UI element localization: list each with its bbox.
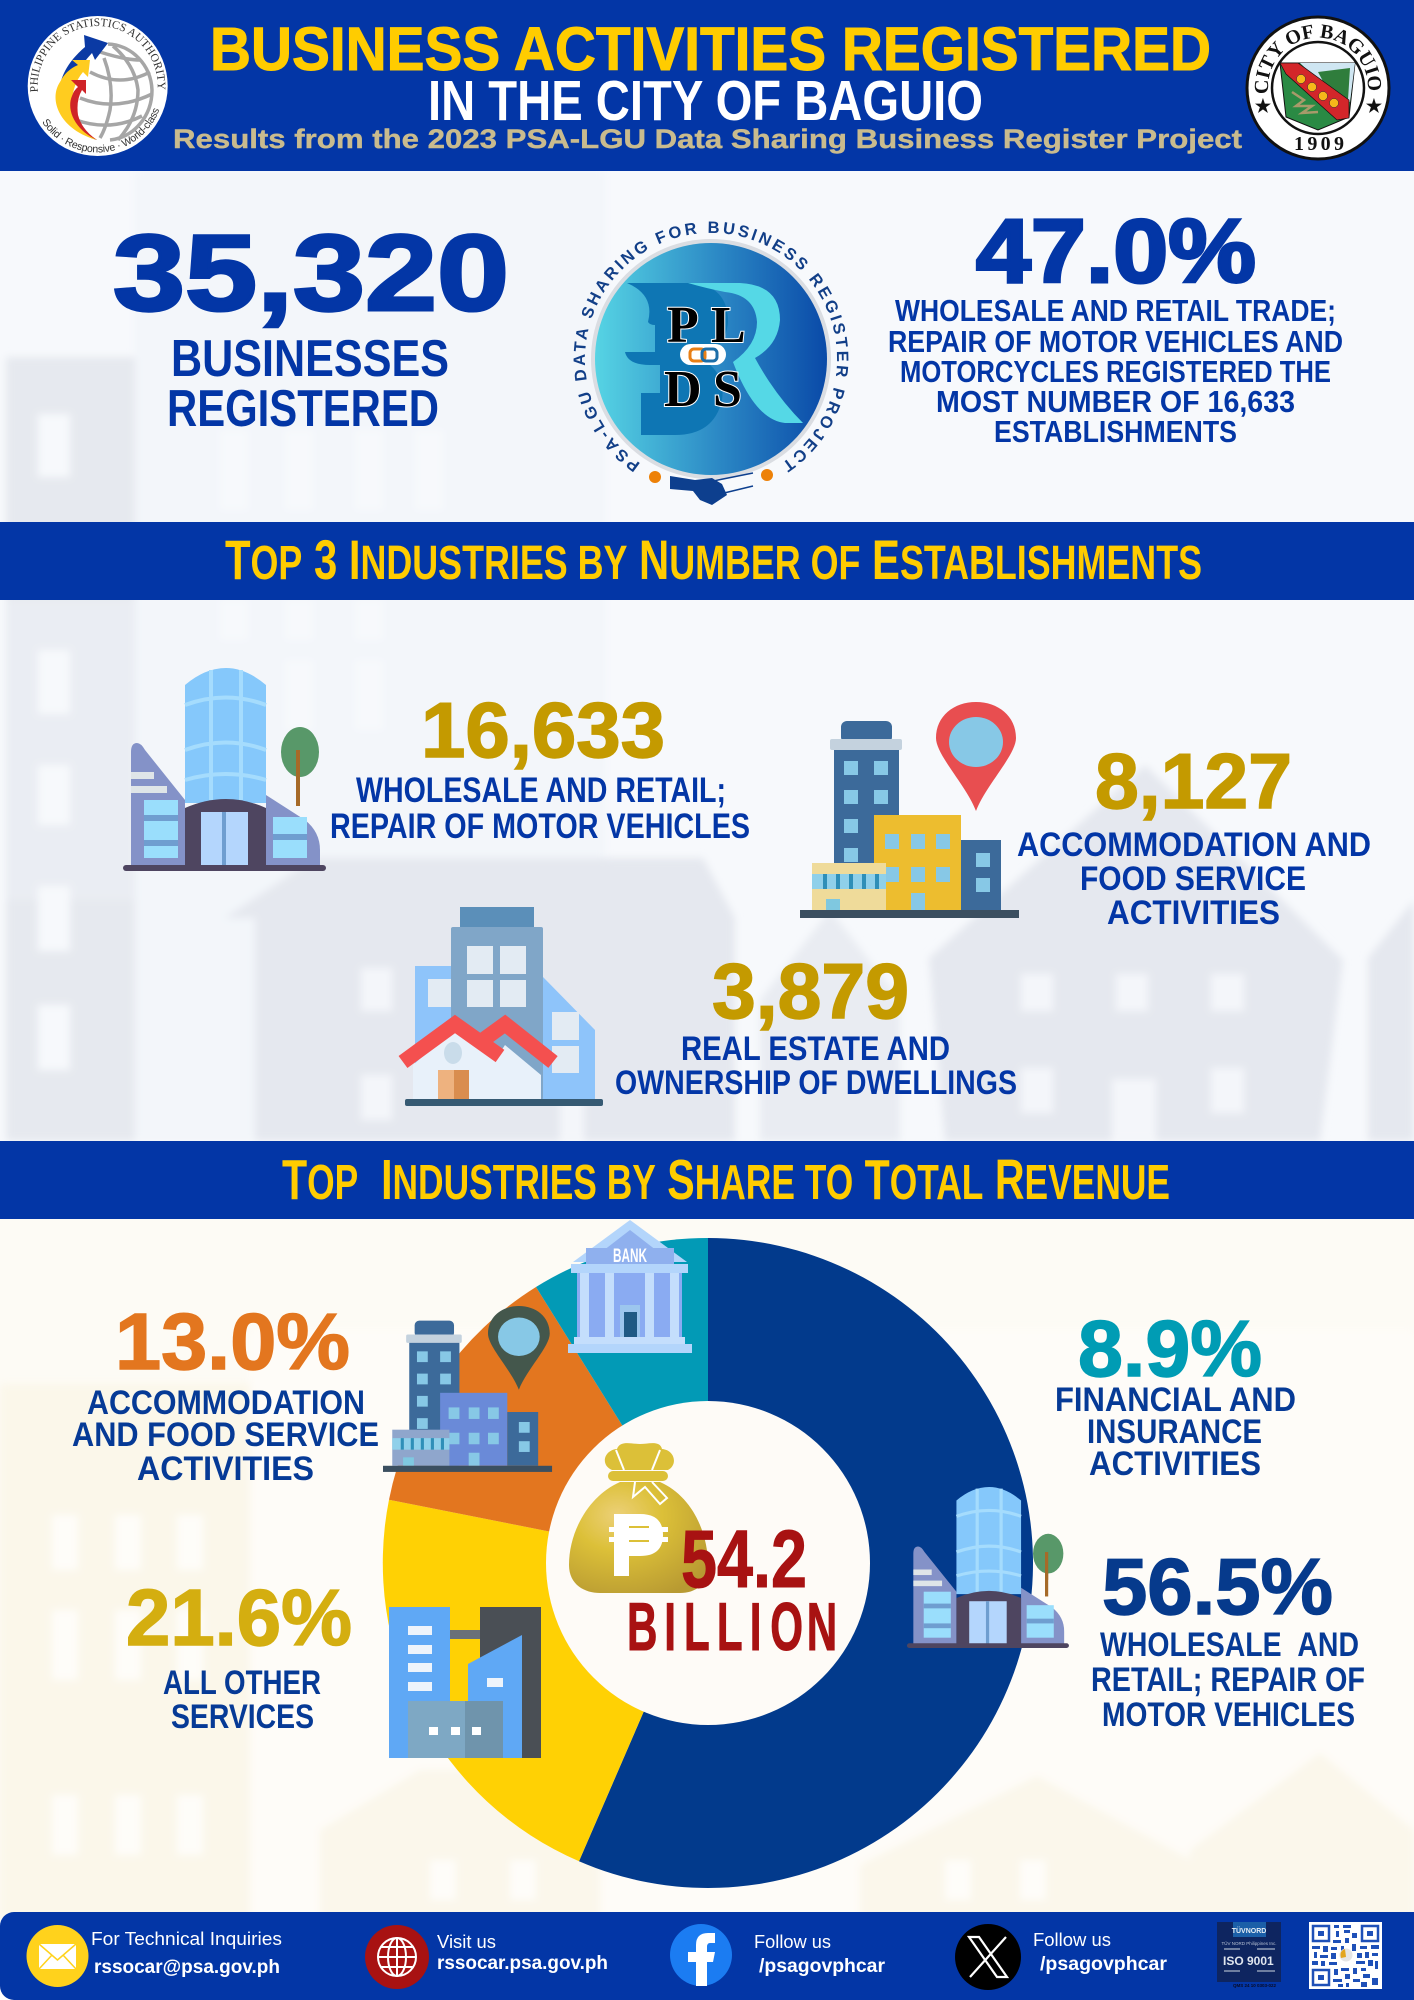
icon: City of Baguio seal <box>1246 16 1390 160</box>
section heading band: top industries by revenue <box>0 1141 1414 1219</box>
icon: PLDS data sharing logo: PSA-LGU DATA SHARING FOR BUSINESS REGISTER PROJECT <box>574 222 848 472</box>
stat: 47.0% wholesale and retail: MOST NUMBER OF 16,633 <box>936 384 1295 419</box>
stat: 47.0% wholesale and retail: MOTORCYCLES REGISTERED THE <box>900 354 1331 389</box>
label: 21.6% all other services: SERVICES <box>171 1698 314 1736</box>
icon: bank <box>568 1220 692 1353</box>
text: 3,879 real estate: OWNERSHIP OF DWELLINGS <box>615 1064 1017 1102</box>
icon: ISO 9001 badge: TÜV NORD Philippines Inc. <box>1221 1940 1277 1946</box>
text: 3,879 real estate: REAL ESTATE AND <box>681 1030 950 1068</box>
contact: X handle: Follow us <box>1033 1930 1111 1950</box>
stat: 35,320 businesses registered <box>113 212 509 438</box>
title <box>210 15 1211 133</box>
text: 8,127 accommodation <box>1017 737 1371 932</box>
label: 8.9% financial and insurance: INSURANCE <box>1087 1413 1262 1451</box>
contact: facebook handle: Follow us <box>754 1932 831 1952</box>
icon: office building <box>123 668 326 871</box>
text: 16,633 wholesale and retail: REPAIR OF MOTOR VEHICLES <box>330 807 750 846</box>
background: revenue section cityscape <box>0 1219 1414 1920</box>
icon: globe <box>365 1925 429 1989</box>
label: 13.0% accommodation <box>72 1297 379 1488</box>
icon: QR code <box>1309 1922 1382 1989</box>
icon: PLDS data sharing logo: DS <box>664 361 742 418</box>
label: 56.5% wholesale and retail: WHOLESALE AND <box>1100 1626 1359 1664</box>
donut hole <box>546 1401 870 1725</box>
center label: 54.2 billion: 54.2 <box>681 1514 807 1605</box>
icon: PSA logo <box>28 16 168 156</box>
stat: 35,320 businesses registered: 35,320 <box>113 212 509 333</box>
icon: real estate tower and house <box>403 907 603 1106</box>
stat: 35,320 businesses registered: BUSINESSES <box>171 330 449 388</box>
icon: City of Baguio seal: ★ <box>1366 96 1383 116</box>
segment: wholesale 56.5% <box>579 1238 1033 1888</box>
label: 8.9% financial and insurance: ACTIVITIES <box>1089 1445 1261 1483</box>
icon: City of Baguio seal: 1909 <box>1294 133 1344 155</box>
header banner <box>0 0 1414 171</box>
subtitle: Results from the 2023 PSA-LGU Data Sharing Business Register Project <box>173 124 1242 154</box>
text: 8,127 accommodation: ACTIVITIES <box>1107 894 1280 932</box>
stat: 47.0% wholesale and retail: ESTABLISHMENTS <box>994 414 1237 449</box>
text: 8,127 accommodation: FOOD SERVICE <box>1080 860 1306 898</box>
label: 56.5% wholesale and retail <box>1091 1542 1365 1734</box>
label: 56.5% wholesale and retail: MOTOR VEHICLES <box>1102 1696 1355 1734</box>
label: 21.6% all other services: 21.6% <box>126 1573 352 1662</box>
contact: website <box>437 1932 608 1974</box>
icon: handshake <box>670 473 753 505</box>
label: 56.5% wholesale and retail: 56.5% <box>1102 1542 1333 1631</box>
contact: X handle <box>1033 1930 1168 1975</box>
icon: email <box>26 1925 88 1987</box>
footer <box>0 1912 1414 2000</box>
text: 16,633 wholesale and retail: 16,633 <box>421 686 665 774</box>
icon: facebook <box>670 1924 732 1986</box>
text: 16,633 wholesale and retail <box>330 686 750 846</box>
donut chart: share to total revenue <box>383 1238 1033 1888</box>
contact: facebook handle <box>754 1932 886 1977</box>
label: 13.0% accommodation: ACCOMMODATION <box>87 1384 365 1422</box>
contact: technical inquiries: rssocar@psa.gov.ph <box>94 1957 280 1978</box>
icon: ISO 9001 badge <box>1217 1922 1281 1988</box>
contact: technical inquiries <box>91 1929 282 1978</box>
label: 56.5% wholesale and retail: RETAIL; REPAIR OF <box>1091 1661 1365 1699</box>
section heading band: top industries by revenue: TOP INDUSTRIES BY SHARE TO TOTAL REVENUE <box>282 1148 1170 1212</box>
center label: 54.2 billion: BILLION <box>627 1589 837 1664</box>
icon: City of Baguio seal: ★ <box>1255 96 1272 116</box>
text: 8,127 accommodation: ACCOMMODATION AND <box>1017 826 1371 864</box>
icon: City of Baguio seal: CITY OF BAGUIO <box>1254 24 1382 93</box>
section heading band: top 3 industries <box>0 522 1414 600</box>
text: 3,879 real estate <box>615 947 1017 1102</box>
center label: 54.2 billion <box>627 1514 837 1664</box>
icon: PSA logo: Solid · Responsive · World-class <box>43 108 159 153</box>
icon: ISO 9001 badge: ISO 9001 <box>1223 1954 1274 1968</box>
icon: city buildings in donut <box>383 1306 552 1472</box>
icon: money bag with peso sign <box>569 1443 708 1593</box>
label: 8.9% financial and insurance: FINANCIAL AND <box>1055 1381 1296 1419</box>
icon: PSA logo: PHILIPPINE STATISTICS AUTHORITY <box>30 18 166 92</box>
background: section cityscape <box>0 171 1414 1141</box>
label: 13.0% accommodation: ACTIVITIES <box>137 1450 314 1488</box>
icon: X <box>955 1924 1021 1990</box>
label: 13.0% accommodation: 13.0% <box>115 1297 350 1386</box>
contact: website: Visit us <box>437 1932 496 1952</box>
icon: office building in donut <box>907 1487 1069 1648</box>
label: 21.6% all other services <box>126 1573 352 1736</box>
label: 21.6% all other services: ALL OTHER <box>163 1664 321 1702</box>
stat: 47.0% wholesale and retail <box>888 202 1343 449</box>
label: 8.9% financial and insurance <box>1055 1304 1296 1483</box>
label: 8.9% financial and insurance: 8.9% <box>1078 1304 1262 1393</box>
segment: all other 21.6% <box>383 1500 708 1861</box>
stat: 47.0% wholesale and retail: 47.0% <box>976 202 1256 302</box>
icon: bank: BANK <box>613 1246 647 1267</box>
contact: facebook handle: /psagovphcar <box>759 1956 886 1977</box>
segment: accommodation 13.0% <box>389 1287 708 1563</box>
icon: PLDS data sharing logo: PL <box>667 297 746 354</box>
label: 13.0% accommodation: AND FOOD SERVICE <box>72 1416 379 1454</box>
section heading band: top 3 industries: TOP 3 INDUSTRIES BY NUMBER OF ESTABLISHMENTS <box>225 528 1202 591</box>
title: BUSINESS ACTIVITIES REGISTERED <box>210 15 1211 83</box>
icon: ISO 9001 badge: QMS 24 10 0303-022 <box>1233 1983 1277 1988</box>
icon: city buildings with location pin <box>800 702 1019 918</box>
icon: tall buildings <box>389 1607 541 1758</box>
stat: 35,320 businesses registered: REGISTERED <box>167 380 439 438</box>
contact: website: rssocar.psa.gov.ph <box>437 1953 608 1974</box>
contact: technical inquiries: For Technical Inquiries <box>91 1929 282 1949</box>
title: IN THE CITY OF BAGUIO <box>428 69 983 133</box>
stat: 47.0% wholesale and retail: WHOLESALE AND RETAIL TRADE; <box>895 293 1336 328</box>
icon: ISO 9001 badge: TÜVNORD <box>1232 1926 1266 1935</box>
text: 16,633 wholesale and retail: WHOLESALE AND RETAIL; <box>356 771 726 810</box>
stat: 47.0% wholesale and retail: REPAIR OF MOTOR VEHICLES AND <box>888 324 1343 359</box>
text: 3,879 real estate: 3,879 <box>712 947 909 1035</box>
segment: financial 8.9% <box>536 1238 708 1563</box>
text: 8,127 accommodation: 8,127 <box>1095 737 1292 825</box>
contact: X handle: /psagovphcar <box>1040 1954 1168 1975</box>
